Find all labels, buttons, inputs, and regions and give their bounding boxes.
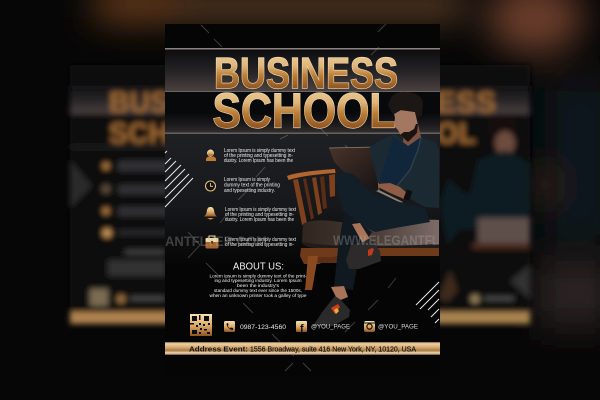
watermark text: WWW.ELEGANTFL	[333, 233, 439, 248]
about us	[210, 262, 307, 298]
instagram contact: @YOU_PAGE	[378, 324, 419, 330]
address bar: Address Event:	[189, 346, 248, 354]
upper shoe	[346, 238, 381, 269]
text block 4	[225, 237, 296, 248]
beard	[400, 124, 418, 142]
QR code	[190, 314, 212, 336]
laptop	[329, 147, 379, 190]
decorative stripes: right	[416, 282, 439, 323]
info panel background	[165, 134, 440, 264]
text block 2: dummy text of the printing	[224, 182, 280, 188]
about body	[210, 274, 307, 298]
lower ankle	[331, 286, 348, 301]
icon: clock	[206, 181, 216, 191]
chair frame and leg	[300, 248, 439, 290]
text block 1	[224, 148, 295, 164]
text block 4: of the printing and typesetting in-	[225, 242, 294, 248]
header band: bottom	[165, 92, 440, 134]
icon: bell	[204, 207, 217, 220]
phone contact: 0987-123-4560	[240, 324, 286, 331]
text block 3: dustry. Lorem Ipsum has been the	[225, 217, 294, 223]
title: BUSINESS	[214, 49, 398, 98]
text block 3: of the printing and typesetting in-	[225, 212, 294, 218]
address bar: 1556 Broadway, suite 416 New York, NY, 10120, USA	[250, 346, 416, 354]
about body: standard dummy text ever since the 1500s,	[214, 288, 302, 293]
icon: phone	[224, 321, 235, 332]
blurred duplicate flyer: right: ESS	[436, 87, 496, 119]
instagram contact	[364, 321, 419, 332]
text block 2: Lorem Ipsum is simply	[224, 177, 270, 183]
blurred duplicate flyer: right	[435, 65, 530, 325]
about body: when an unknown printer took a galley of type	[210, 293, 307, 298]
text block 2: and typesetting industry.	[224, 188, 275, 194]
text block 1: Lorem Ipsum is simply dummy text	[224, 148, 295, 154]
about body: Lorem Ipsum is simply dummy text of the print-	[210, 274, 307, 278]
main flyer	[165, 24, 440, 376]
icon: instagram	[364, 321, 375, 332]
shirt	[380, 137, 421, 186]
watermark cross below bar	[285, 363, 311, 371]
about heading: ABOUT US:	[233, 262, 284, 272]
neck	[403, 124, 421, 146]
title	[212, 49, 398, 138]
about body: ing and typesetting industry. Lorem Ipsum	[214, 278, 302, 283]
text block 3: Lorem Ipsum is simply dummy text	[225, 207, 296, 213]
flyer background	[165, 24, 440, 376]
watermark diagonals	[188, 24, 396, 356]
ankle	[352, 223, 370, 244]
text block 4: Lorem Ipsum is simply dummy text	[225, 237, 296, 243]
seat cushion	[302, 220, 439, 248]
title: SCHOOL	[212, 83, 396, 138]
facebook contact: @YOU_PAGE	[311, 324, 351, 330]
about body: been the industry's	[237, 283, 280, 288]
face	[394, 110, 418, 142]
jacket	[369, 134, 439, 208]
blurred duplicate flyer: right: OL	[436, 118, 476, 150]
address bar	[165, 342, 440, 355]
watermark text	[165, 233, 439, 249]
blurred duplicate flyer: left: BUS	[109, 87, 169, 119]
icon: graduate	[206, 150, 216, 161]
text block 3	[225, 207, 296, 223]
chair back	[287, 169, 336, 225]
header band: top	[165, 48, 440, 92]
laptop base	[376, 190, 403, 203]
text block 1: of the printing and typesetting in-	[224, 153, 293, 159]
icon: briefcase	[206, 236, 218, 248]
lower shoe	[313, 296, 350, 326]
hair	[388, 92, 423, 118]
blurred duplicate flyer: left	[70, 65, 170, 325]
text block 2	[224, 177, 280, 194]
watermark text: ANTFLYER.COM	[165, 234, 267, 249]
decorative stripes: left	[165, 151, 193, 207]
hand and watch	[378, 183, 413, 201]
blurred duplicate flyer: left: SCH	[109, 118, 169, 150]
icon: facebook: f	[300, 323, 304, 335]
phone contact	[224, 321, 286, 332]
facebook contact	[296, 321, 351, 335]
trousers	[334, 173, 430, 290]
text block 1: dustry. Lorem Ipsum has been the	[224, 158, 293, 164]
person on chair	[287, 92, 439, 326]
